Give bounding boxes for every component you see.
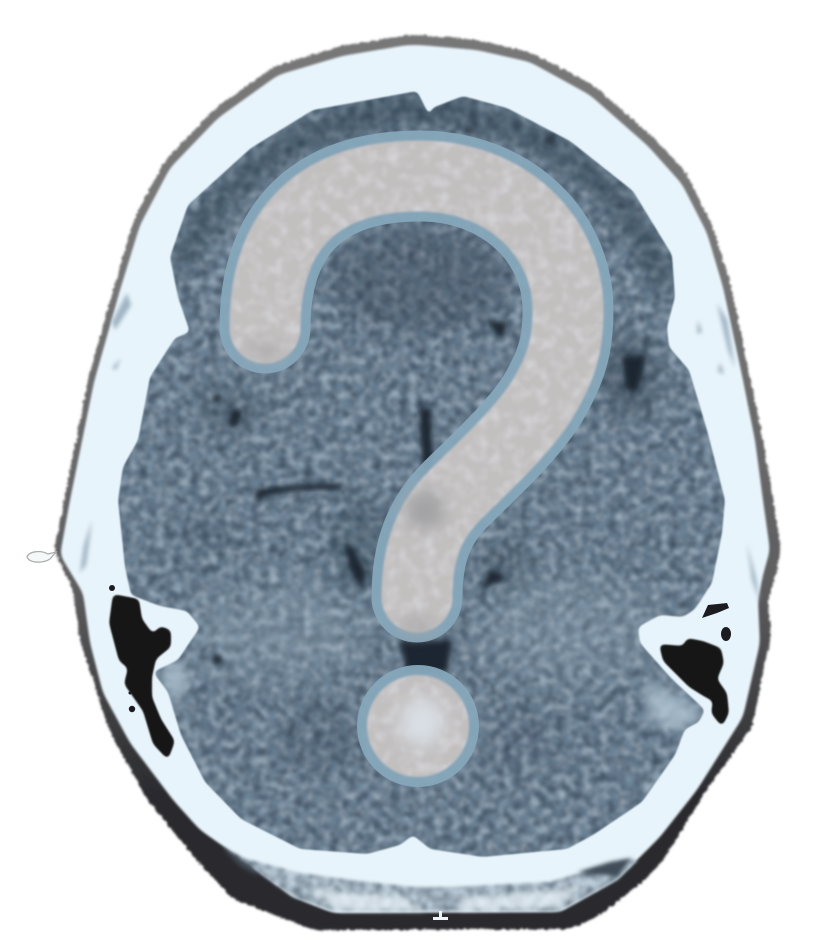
skin tag on left bbox=[27, 552, 56, 562]
skull bone bbox=[60, 45, 770, 913]
shading in question mark bbox=[245, 342, 445, 746]
question mark bbox=[245, 176, 568, 787]
brain tissue bbox=[100, 80, 740, 870]
question mark hook fill bbox=[265, 176, 568, 597]
left small air dots bbox=[109, 585, 135, 712]
right small air pockets bbox=[702, 603, 731, 641]
question mark dot outline bbox=[357, 665, 479, 787]
fat streaks in the scalp bbox=[80, 293, 760, 603]
darker cortex rim and central region bbox=[172, 94, 676, 775]
small marker at base of skull bbox=[433, 911, 448, 920]
right air cell bbox=[659, 638, 729, 727]
lighter lower lobes bbox=[190, 580, 660, 680]
question mark dot fill bbox=[367, 675, 469, 777]
left air cell bbox=[109, 594, 175, 760]
pale wedges at the tentorium bbox=[158, 662, 705, 730]
central fissures and sulci bbox=[212, 125, 646, 672]
scalp texture at base of skull bbox=[222, 846, 638, 911]
question mark hook outline bbox=[265, 176, 568, 597]
